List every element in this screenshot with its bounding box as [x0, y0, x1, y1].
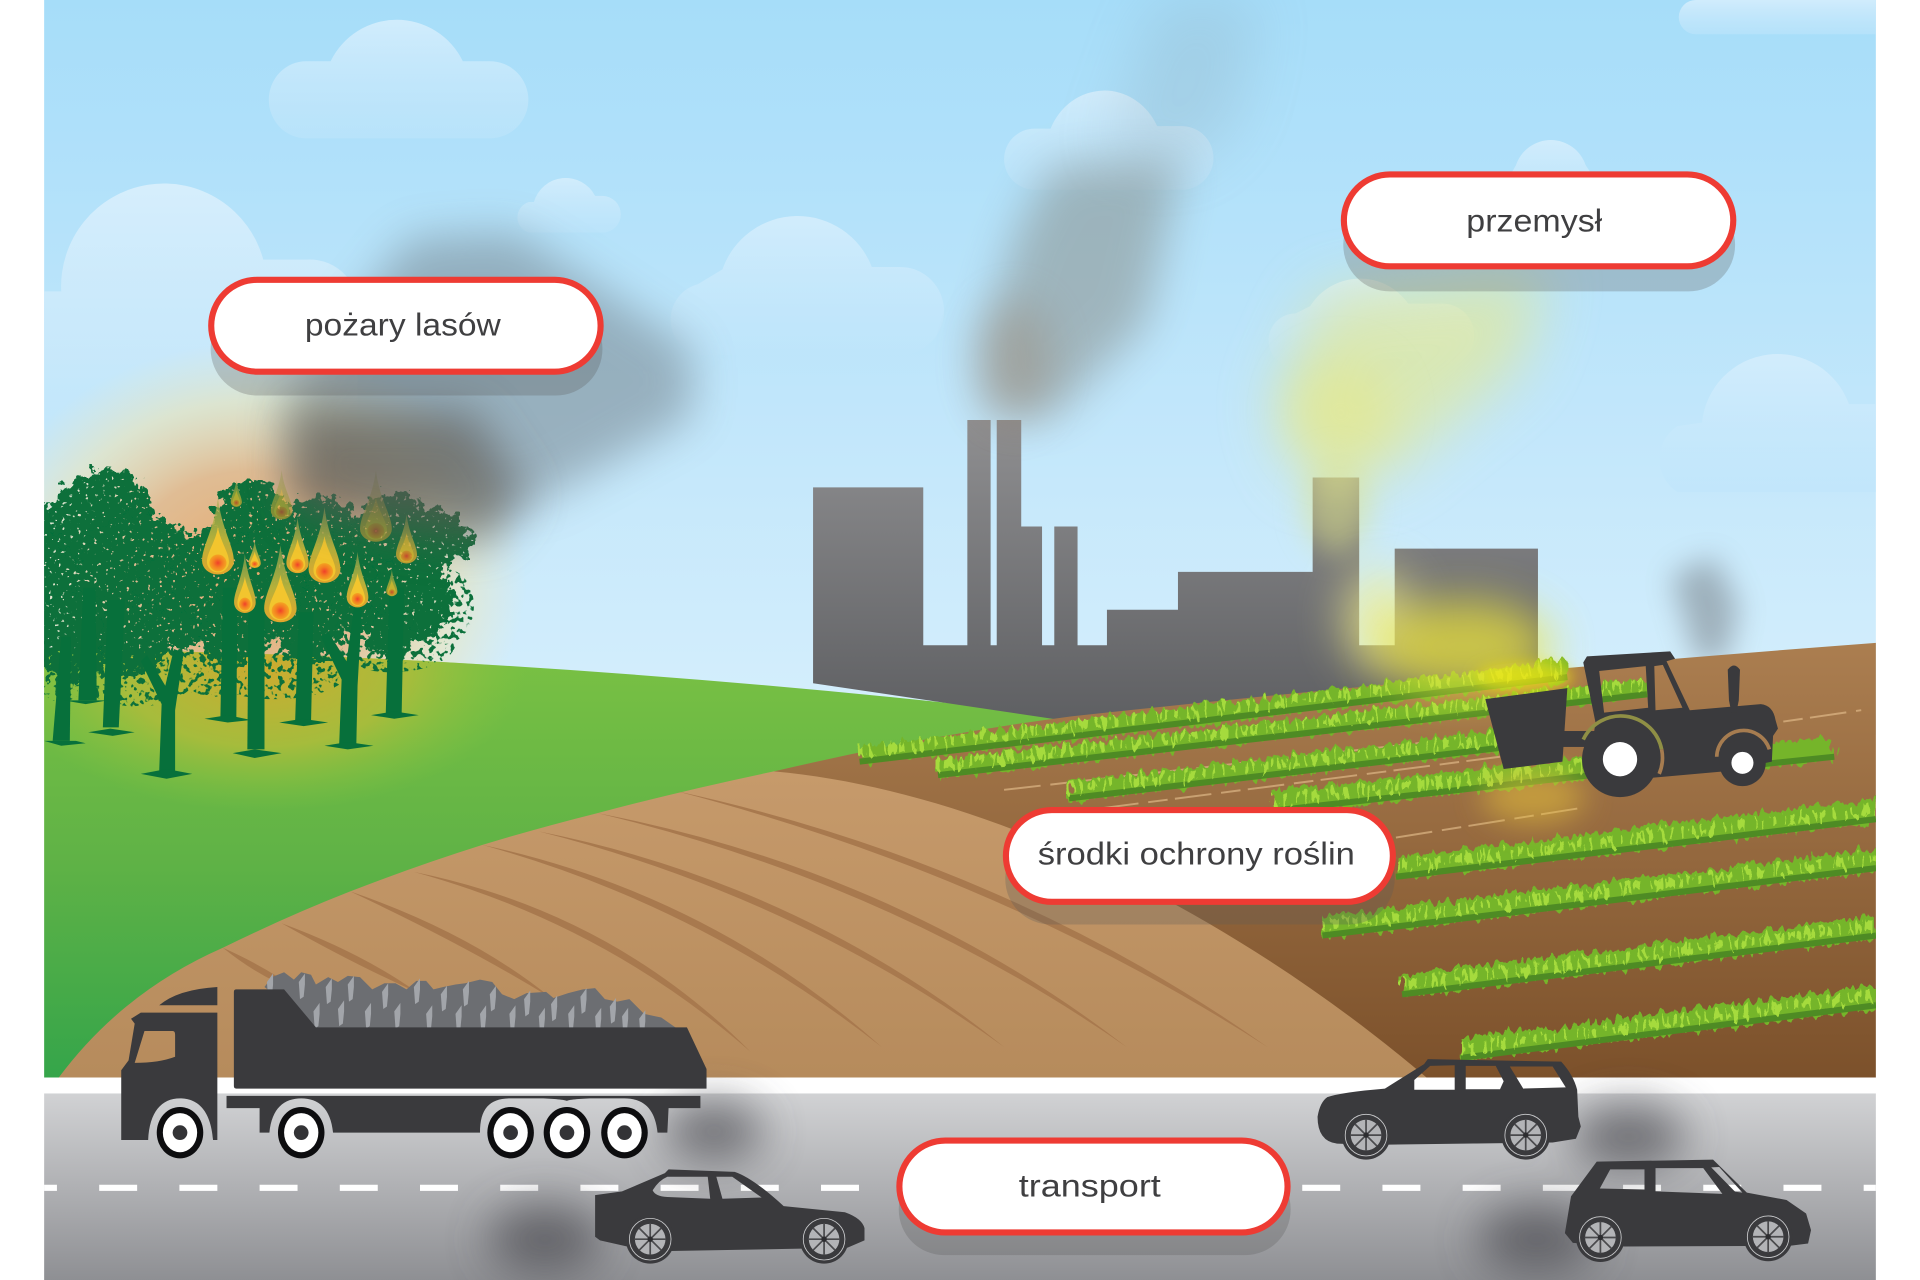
crop bases: [860, 677, 1876, 1058]
crop blades: [860, 660, 1876, 1060]
tree bases: [44, 700, 419, 779]
tractor cab and body: [1583, 651, 1778, 779]
car: SUV: [1318, 1059, 1581, 1160]
truck chassis: [227, 1096, 700, 1133]
truck cab spoiler: [159, 987, 217, 1005]
truck cab: [121, 1013, 217, 1140]
car: sedan: [595, 1169, 864, 1264]
truck dump box: [234, 989, 707, 1089]
lane markings: [19, 1185, 1876, 1190]
light brown field: [59, 771, 1427, 1078]
furrows in the light field: [223, 791, 1267, 1052]
dark ploughed field: [774, 643, 1876, 1078]
forest fire glow on the grass: [44, 650, 498, 797]
tractor exhaust pipe: [1728, 666, 1740, 713]
tractor front wheel: [1719, 740, 1766, 786]
smoke: yellow chemical plume: [1273, 272, 1549, 670]
road: [19, 1078, 1876, 1280]
clouds: [44, 0, 1876, 492]
tractor hopper: [1485, 688, 1567, 769]
crop highlights: [860, 667, 1876, 1048]
road shoulder: [44, 1078, 1876, 1093]
sky background: [44, 0, 1876, 735]
crop rows: [860, 660, 1876, 1060]
forest: [0, 469, 474, 779]
sparse lower foliage: [32, 569, 474, 707]
label: pożary lasów: [211, 280, 602, 396]
road surface: [44, 1093, 1876, 1280]
truck: [121, 972, 707, 1158]
yellow pesticide spray: [1375, 600, 1584, 824]
label: pożary lasów: pożary lasów: [305, 307, 502, 343]
label: środki ochrony roślin: środki ochrony roślin: [1038, 835, 1355, 871]
label: przemysł: [1343, 174, 1735, 291]
green hill: [44, 649, 1054, 1078]
label: transport: [899, 1141, 1291, 1255]
truck load of rocks: [264, 972, 677, 1036]
tractor rear wheel: [1582, 721, 1658, 797]
tractor fenders: [1583, 716, 1769, 774]
label: transport: transport: [1019, 1167, 1161, 1203]
factory silhouette: [813, 420, 1538, 722]
label: przemysł: przemysł: [1466, 202, 1602, 238]
tracks on the dark field: [1004, 710, 1861, 838]
tractor exhaust smoke: [1671, 557, 1739, 661]
smoke: forest fire: [279, 233, 692, 545]
car: hatchback: [1565, 1160, 1811, 1262]
tractor: [1485, 651, 1778, 797]
smoke: factory chimneys: [977, 0, 1261, 422]
forest fire glow over the sky: [44, 359, 510, 664]
tree canopies: [0, 469, 473, 681]
truck wheels: [157, 1107, 648, 1158]
label: środki ochrony roślin: [1005, 810, 1395, 924]
exhaust clouds: [489, 1102, 1685, 1273]
tree trunks: [53, 637, 71, 741]
forest fire flames: [202, 470, 417, 622]
tractor hitch: [1563, 731, 1594, 747]
